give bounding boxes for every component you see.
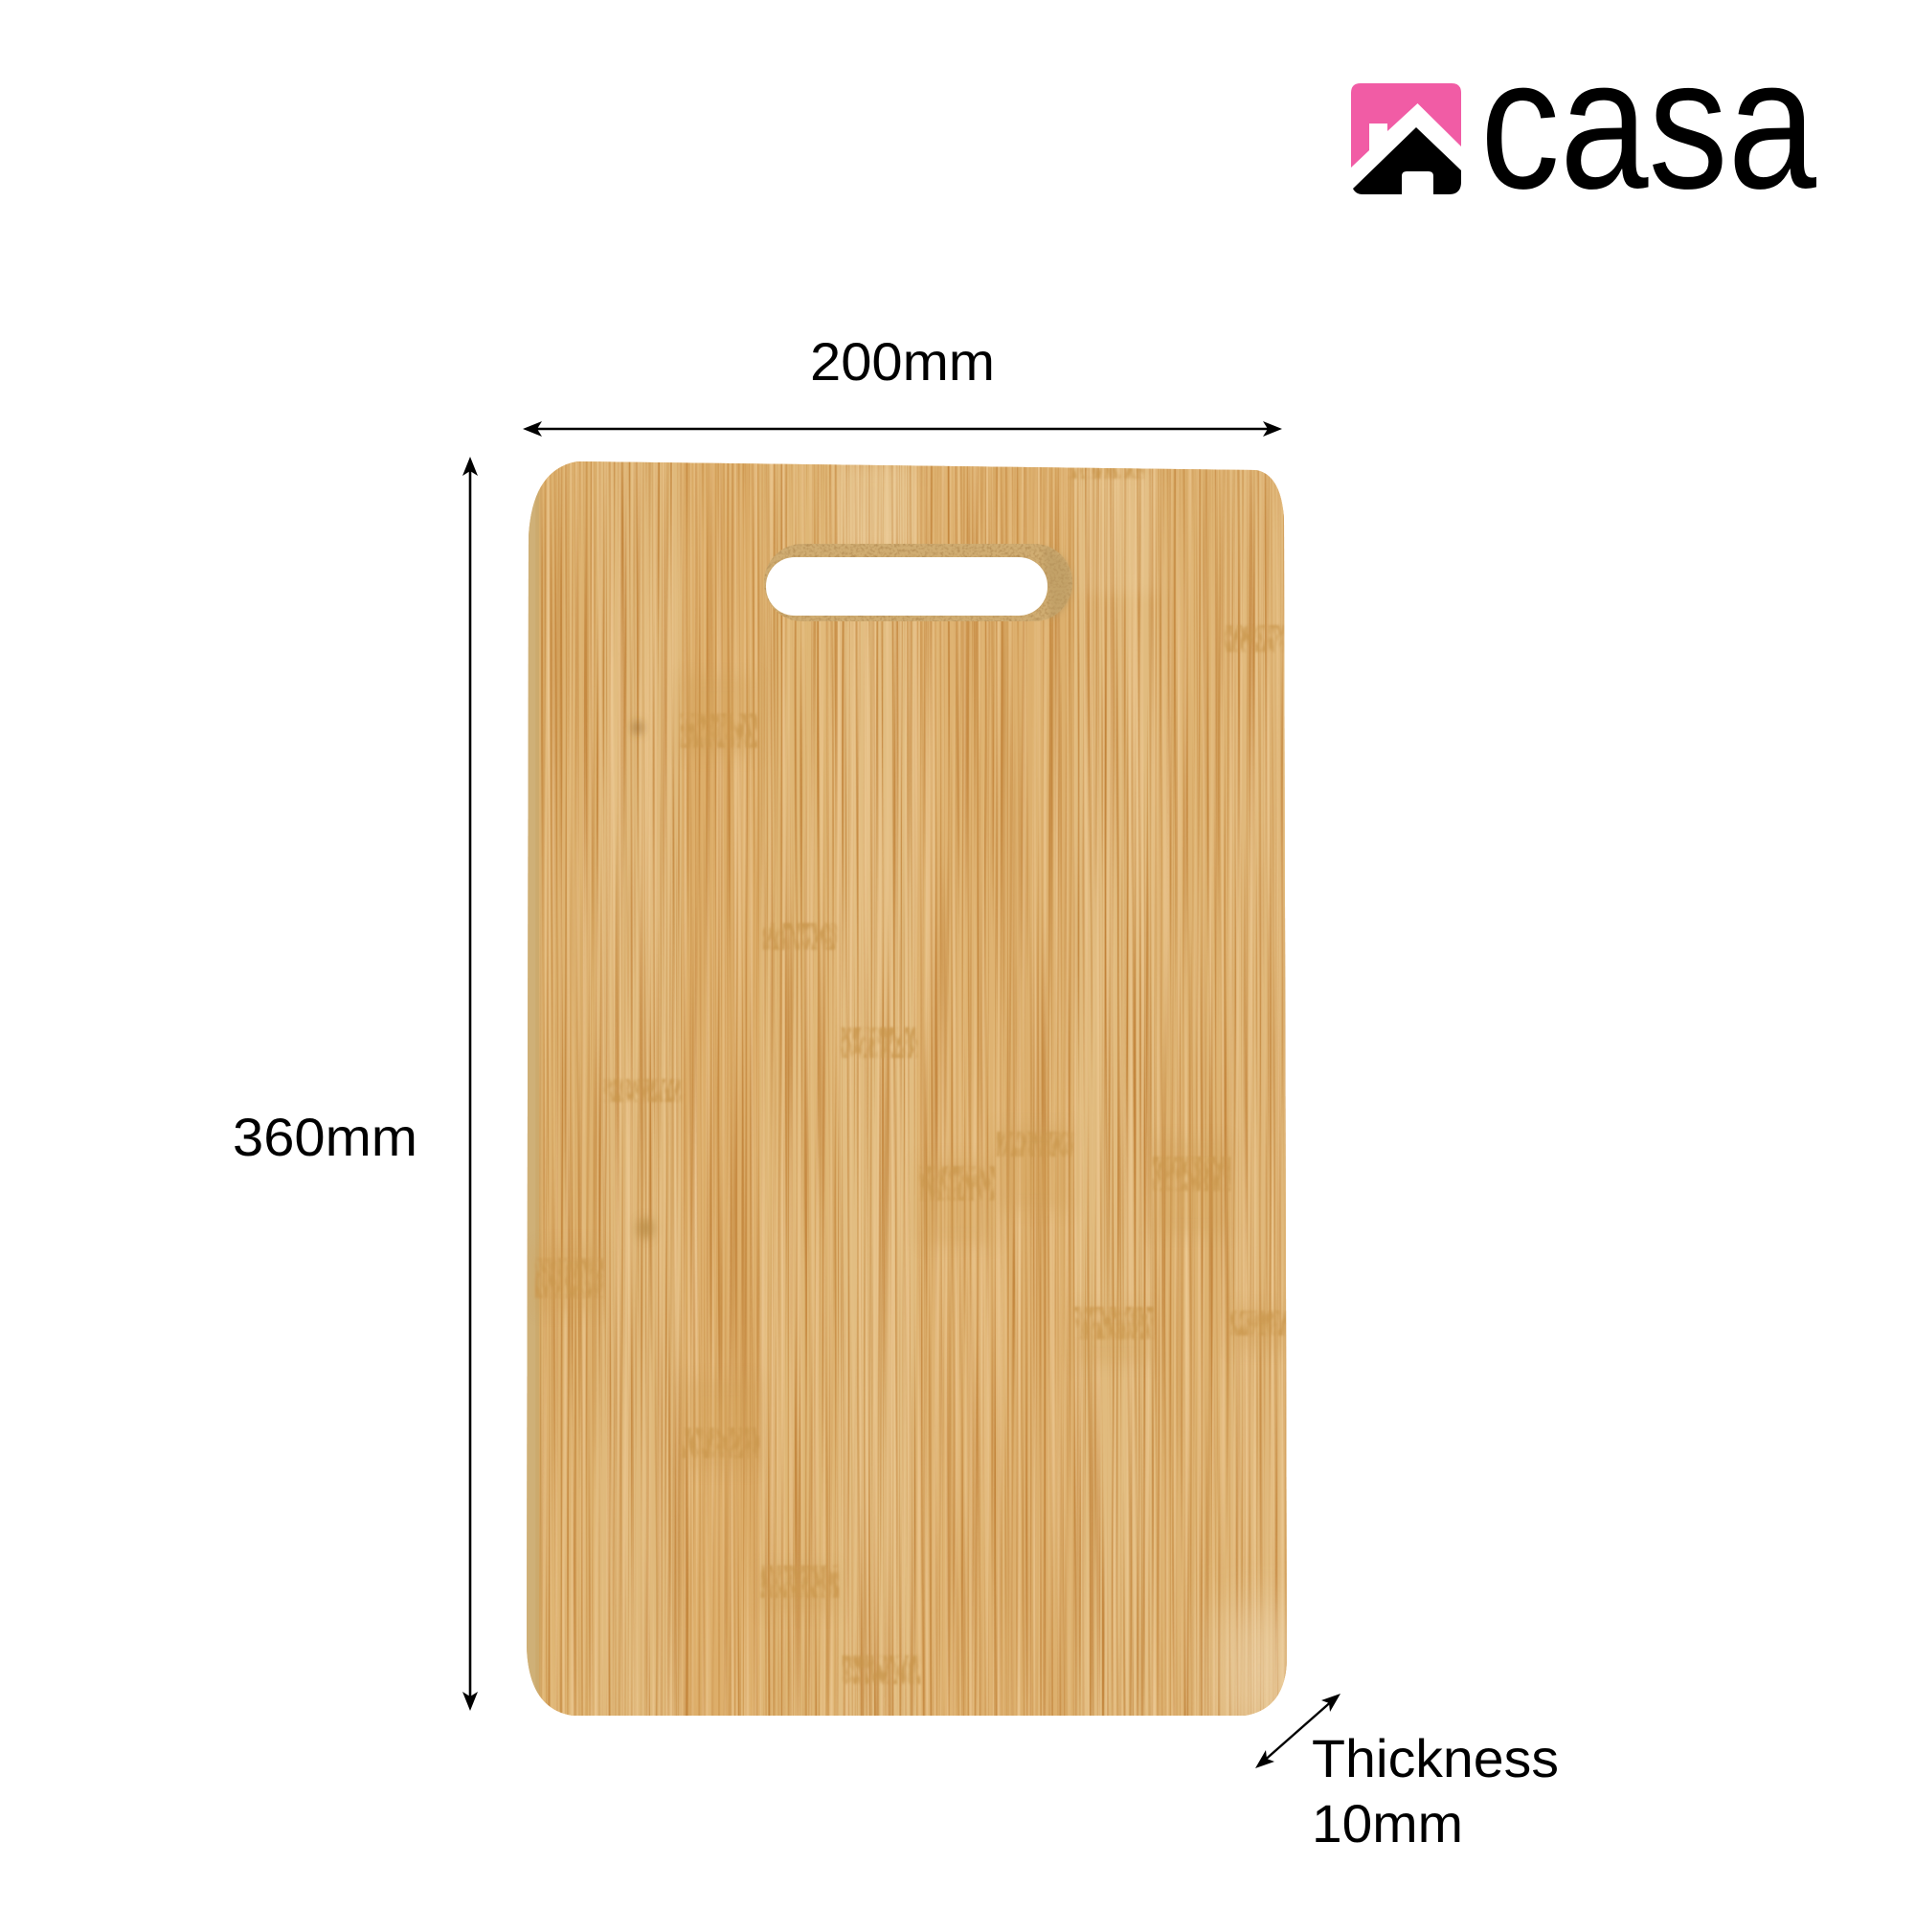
thickness label: Thickness [1312,1728,1559,1788]
knots [634,722,653,1239]
arrow: height [462,457,478,1711]
height label: 360mm [233,1107,417,1167]
thickness label [1312,1728,1559,1853]
bamboo node shading [535,675,1287,1613]
bamboo cutting board [519,458,1302,1733]
logo icon: pink square with house [1351,83,1461,194]
infographic: cutting board dimensions [235,83,1816,1842]
width label: 200mm [810,331,995,392]
logo wordmark: casa [1480,20,1816,228]
bamboo nodes [535,467,1287,1684]
arrow: width [523,421,1282,437]
handle slot [764,544,1072,621]
logo: casa [1351,20,1816,228]
arrow: thickness [1255,1694,1340,1768]
thickness label: 10mm [1312,1793,1463,1853]
